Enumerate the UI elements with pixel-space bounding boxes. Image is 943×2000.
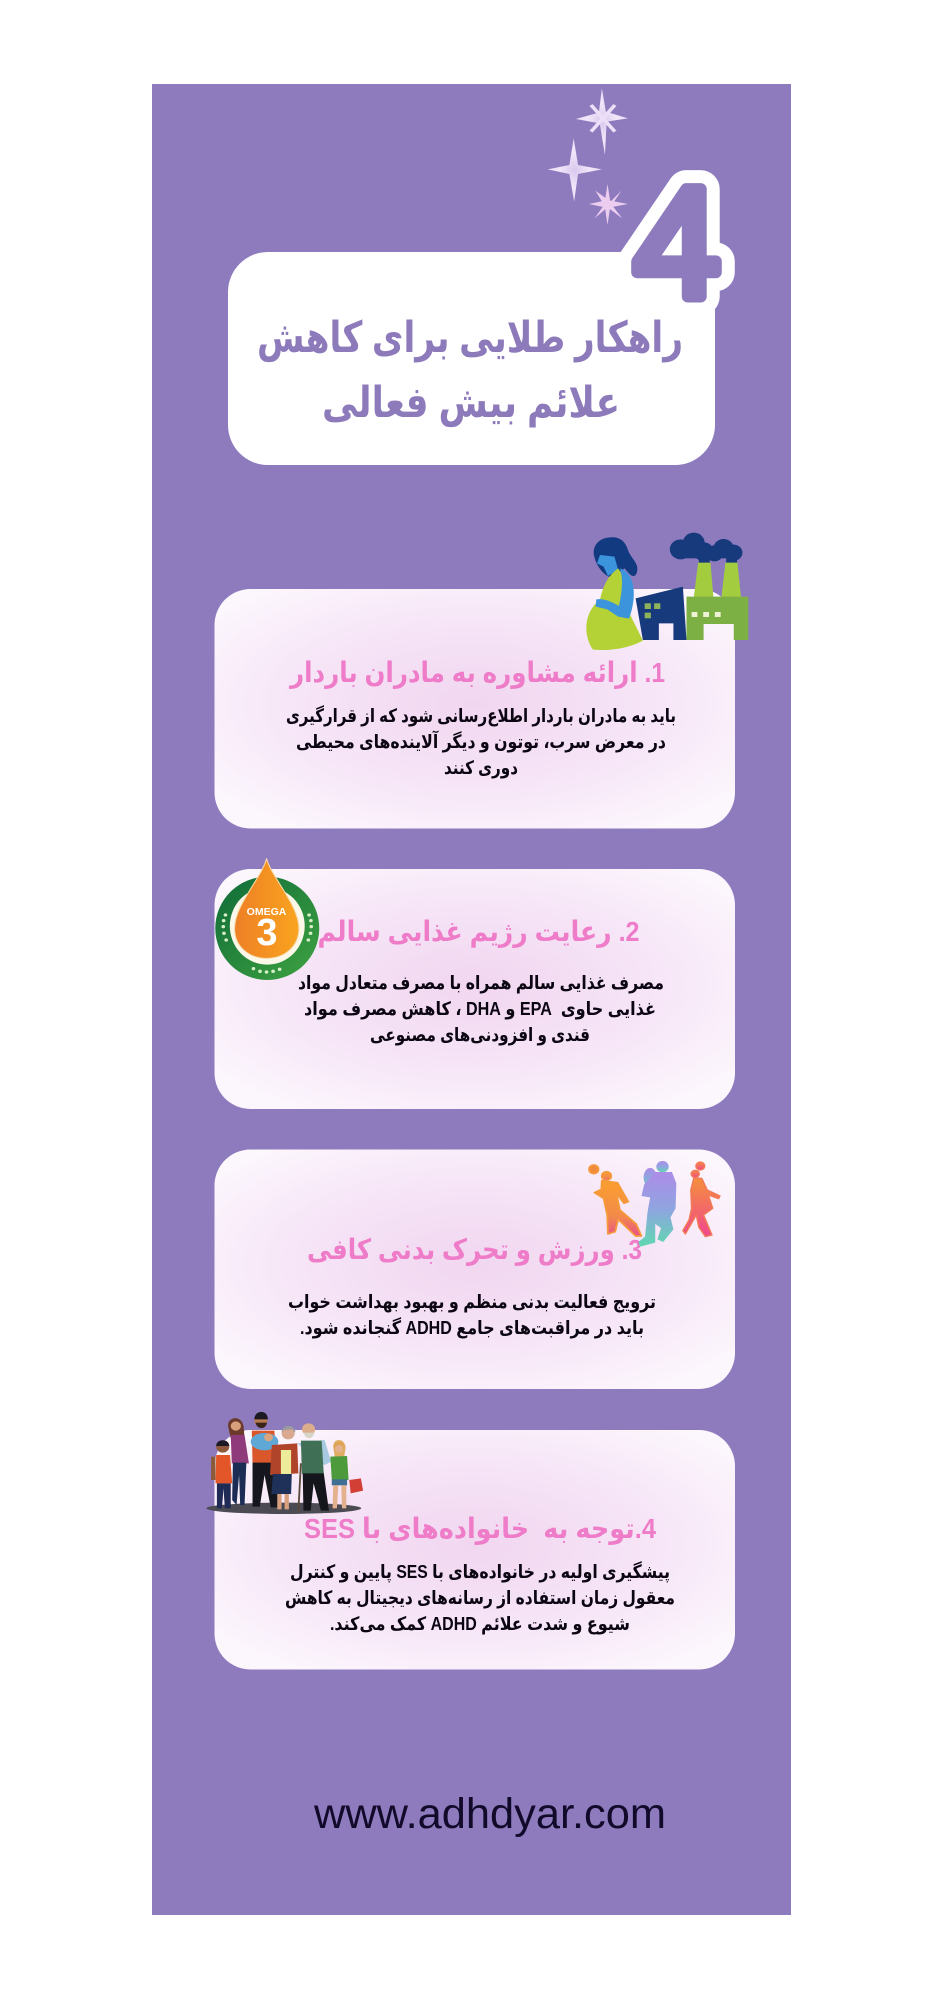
- smoke: [670, 533, 742, 565]
- body 3: ترویج فعالیت بدنی منظم و بهبود بهداشت خواب: [288, 1291, 656, 1313]
- grandmother: [282, 1427, 295, 1439]
- grandfather: [302, 1423, 315, 1435]
- website URL: www.adhdyar.com: [313, 1791, 666, 1838]
- girl: [334, 1442, 345, 1452]
- father: [254, 1415, 267, 1427]
- icon: sparkles: [548, 88, 628, 225]
- body 2: قندی و افزودنی‌های مصنوعی: [370, 1024, 590, 1046]
- panel: card 3: [214, 1150, 735, 1389]
- main purple panel: [152, 84, 791, 1915]
- body 4: معقول زمان استفاده از رسانه‌های دیجیتال به کاهش: [285, 1587, 675, 1609]
- chimneys: [694, 563, 741, 597]
- icon: family group: [206, 1412, 363, 1514]
- body 2: مصرف غذایی سالم همراه با مصرف متعادل مواد: [298, 972, 664, 994]
- body 3: باید در مراقبت‌های جامع ADHD گنجانده شود.: [300, 1317, 644, 1339]
- tennis player: [639, 1161, 676, 1247]
- title card: [228, 252, 715, 465]
- body 2: غذایی حاوی EPA و DHA ، کاهش مصرف مواد: [304, 998, 656, 1020]
- mother: [228, 1418, 245, 1438]
- icon: sports figures: [589, 1161, 720, 1247]
- body 1: دوری کنند: [444, 757, 518, 779]
- icon: omega 3 badge: 3: [256, 912, 278, 954]
- body 1: [286, 705, 676, 779]
- body 1: باید به مادران باردار اطلاع‌رسانی شود که از قرارگیری: [286, 705, 676, 727]
- runner: [589, 1165, 641, 1236]
- panel: card 2: [214, 869, 735, 1109]
- heading 1: 1. ارائه مشاوره به مادران باردار: [288, 657, 665, 689]
- title text: [257, 314, 683, 428]
- big number 4: 4: [634, 156, 720, 330]
- navy building: [636, 587, 686, 640]
- body 2: [298, 972, 664, 1046]
- icon: omega 3 badge: OMEGA: [247, 906, 287, 918]
- icon: omega 3 badge: [215, 858, 319, 980]
- heading 2: 2. رعایت رژیم غذایی سالم: [318, 916, 640, 948]
- body 1: در معرض سرب، توتون و دیگر آلاینده‌های محیطی: [296, 730, 666, 753]
- body 3: [288, 1291, 656, 1339]
- panel: card 1: [214, 589, 735, 828]
- jumping player: [683, 1162, 720, 1237]
- hair: [594, 537, 637, 577]
- heading 4: 4.توجه به خانواده‌های با SES: [304, 1513, 656, 1545]
- green building: [686, 597, 748, 640]
- big number 4: 4: [634, 156, 720, 330]
- bag: [349, 1478, 363, 1493]
- body 4: [285, 1561, 675, 1635]
- boy: [211, 1457, 215, 1480]
- title text: راهکار طلایی برای کاهش: [257, 314, 683, 363]
- title text: علائم بیش فعالی: [322, 379, 620, 428]
- body 4: شیوع و شدت علائم ADHD کمک می‌کند.: [330, 1613, 630, 1635]
- baby: [251, 1433, 278, 1450]
- panel: card 4: [214, 1430, 735, 1670]
- arm: [596, 568, 634, 619]
- heading 3: 3. ورزش و تحرک بدنی کافی: [307, 1234, 642, 1266]
- dress: [586, 568, 643, 650]
- skin: [597, 555, 618, 576]
- body 4: پیشگیری اولیه در خانواده‌های با SES پایین و کنترل: [290, 1561, 670, 1583]
- icon: pregnant woman and factory: [586, 533, 748, 650]
